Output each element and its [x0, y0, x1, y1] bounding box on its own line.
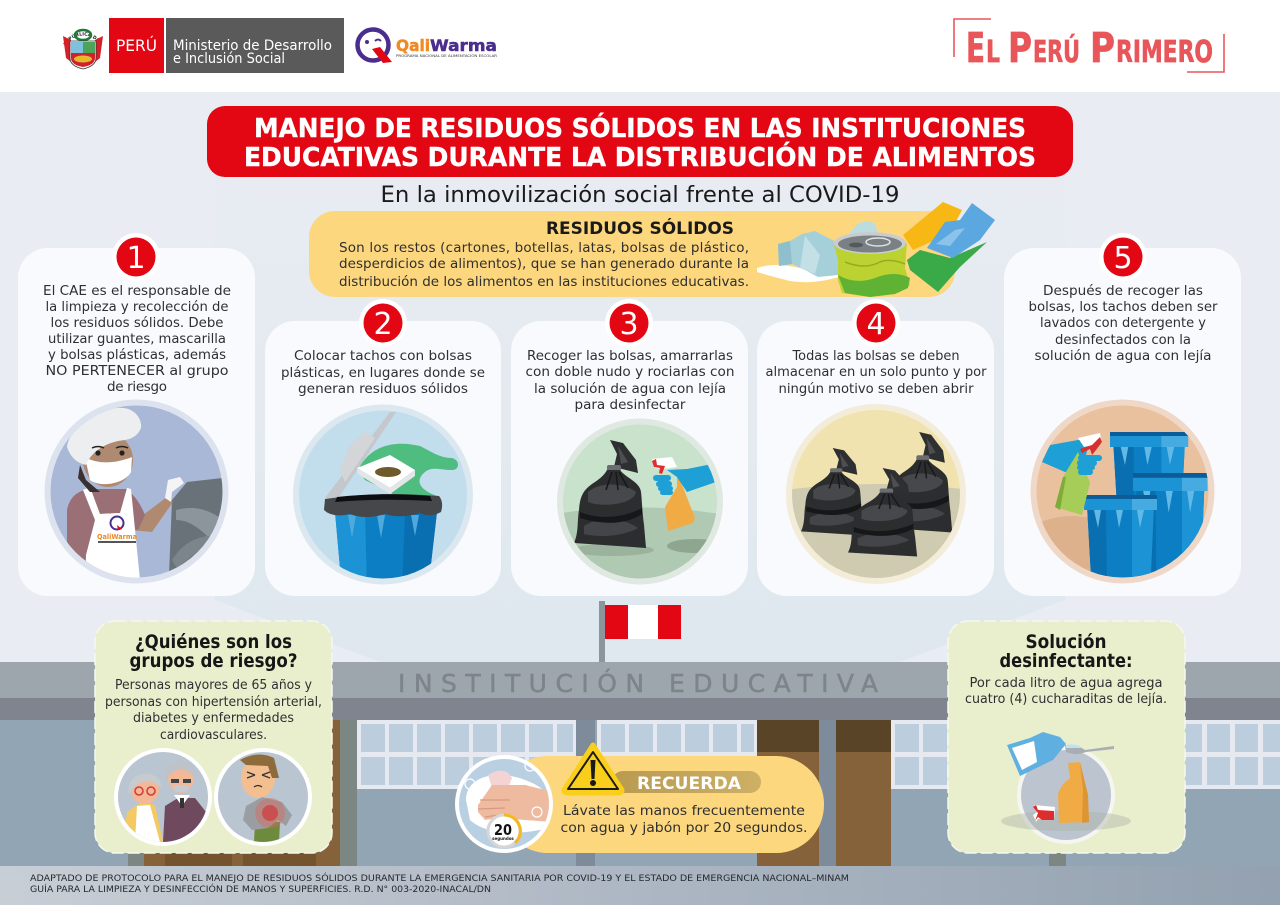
card 2 text: [281, 348, 485, 397]
card 1 text: de riesgo: [107, 379, 167, 395]
logo: Ministerio box: Ministerio de Desarrollo: [173, 38, 332, 54]
footer sources text: ADAPTADO DE PROTOCOLO PARA EL MANEJO DE RESIDUOS SÓLIDOS DURANTE LA EMERGENCIA SANITARIA POR COVID-19 Y EL ESTADO DE EMERGENCIA NACIONAL–MINAM: [30, 872, 849, 884]
title banner: EDUCATIVAS DURANTE LA DISTRIBUCIÓN DE ALIMENTOS: [244, 141, 1036, 173]
panel: residuos sólidos: [309, 202, 995, 297]
panel: recuerda: [455, 745, 824, 853]
icon: washing hands 20 seconds: 20: [494, 821, 512, 839]
logo: Qali Warma: Qali: [396, 36, 430, 55]
riesgo heading: grupos de riesgo?: [130, 650, 298, 672]
logo: El Perú Primero: [954, 19, 1224, 72]
card 4 text: [766, 348, 987, 397]
card 3: [511, 299, 748, 596]
card 2 text: plásticas, en lugares donde se: [281, 365, 485, 381]
header band: [0, 0, 1280, 92]
card 1 text: [43, 283, 231, 395]
card 2 text: generan residuos sólidos: [298, 381, 468, 397]
icon: warning sign: [564, 745, 622, 793]
card 3 text: con doble nudo y rociarlas con: [526, 364, 734, 380]
residuos text: [339, 240, 749, 290]
illustration: bin with tray: [293, 404, 473, 584]
residuos text: distribución de los alimentos en las instituciones educativas.: [339, 274, 749, 290]
logo: Ministerio box: [166, 18, 344, 73]
solución heading: desinfectante:: [1000, 650, 1132, 672]
residuos heading: RESIDUOS SÓLIDOS: [546, 217, 734, 239]
logo: El Perú Primero: E: [966, 24, 985, 72]
logo: El Perú Primero: RIMERO: [1116, 35, 1213, 70]
card 1 text: utilizar guantes, mascarilla: [48, 331, 226, 347]
card 5 text: solución de agua con lejía: [1034, 348, 1212, 364]
illustration: bleach and spray bottle: [1001, 732, 1131, 842]
building sign text: INSTITUCIÓN EDUCATIVA: [398, 668, 878, 698]
footer sources text: [30, 872, 849, 895]
riesgo text: cardiovasculares.: [160, 727, 267, 743]
illustration: worker with bag: QaliWarma: [97, 533, 137, 541]
number badge 2: 2: [373, 307, 393, 342]
solución heading: [1000, 631, 1132, 672]
recuerda text: Lávate las manos frecuentemente: [563, 803, 805, 819]
card 1 text: la limpieza y recolección de: [46, 299, 228, 315]
residuos text: Son los restos (cartones, botellas, latas, bolsas de plástico,: [339, 240, 749, 256]
card 4 text: almacenar en un solo punto y por: [766, 364, 987, 380]
card 1: [18, 233, 255, 596]
card 5 text: [1028, 283, 1218, 364]
logo: Qali Warma: [358, 30, 498, 63]
riesgo text: diabetes y enfermedades: [133, 710, 294, 726]
building: [0, 662, 1280, 866]
card 3 text: Recoger las bolsas, amarrarlas: [527, 348, 733, 364]
illustration: solid waste pile: [757, 202, 995, 297]
solución text: [965, 675, 1167, 707]
recuerda text: con agua y jabón por 20 segundos.: [560, 820, 808, 836]
number badge 3: 3: [619, 307, 639, 342]
riesgo text: Personas mayores de 65 años y: [115, 677, 312, 693]
logo: El Perú Primero: P: [1008, 24, 1032, 72]
logo: Qali Warma: Warma: [430, 36, 497, 55]
icon: washing hands 20 seconds: [455, 755, 555, 853]
number badge 1: [112, 233, 160, 281]
icon: man with heart pain: [214, 748, 312, 846]
card 3 text: para desinfectar: [574, 397, 686, 413]
logo: El Perú Primero: ERÚ: [1033, 33, 1080, 70]
riesgo heading: ¿Quiénes son los: [135, 631, 292, 653]
recuerda label: RECUERDA: [637, 774, 742, 794]
icon: coat of arms of Peru: [63, 28, 103, 70]
logo: PERÚ red box: [109, 18, 164, 73]
card 1 text: NO PERTENECER al grupo: [46, 363, 229, 379]
solución heading: Solución: [1026, 631, 1106, 653]
card 5 text: Después de recoger las: [1043, 283, 1203, 299]
solución text: Por cada litro de agua agrega: [970, 675, 1162, 691]
illustration: washed bins and spray: [1030, 400, 1220, 595]
number badge 4: 4: [866, 307, 886, 342]
logo: Qali Warma: PROGRAMA NACIONAL DE ALIMENTACIÓN ESCOLAR: [396, 53, 498, 58]
flag of Peru: [599, 601, 681, 662]
card 2: [265, 299, 501, 596]
card 3 text: la solución de agua con lejía: [534, 381, 726, 397]
card 4 text: ningún motivo se deben abrir: [778, 381, 974, 397]
title banner: [207, 106, 1073, 177]
residuos text: desperdicios de alimentos), que se han generado durante la: [339, 256, 749, 272]
card 1 text: los residuos sólidos. Debe: [50, 315, 224, 331]
recuerda label: [612, 771, 761, 794]
riesgo text: personas con hipertensión arterial,: [105, 694, 322, 710]
card 5 text: desinfectados con la: [1055, 332, 1191, 348]
riesgo heading: [130, 631, 298, 672]
logo: El Perú Primero: P: [1090, 24, 1115, 72]
card 1 text: El CAE es el responsable de: [43, 283, 231, 299]
number badge 3: [605, 299, 653, 347]
card 4: [757, 299, 994, 596]
card 1 text: y bolsas plásticas, además: [48, 347, 226, 363]
footer strip: [0, 866, 1280, 905]
card 3 text: [526, 348, 734, 413]
logo: Ministerio box: e Inclusión Social: [173, 51, 285, 67]
card 5 text: lavados con detergente y: [1040, 315, 1206, 331]
number badge 2: [359, 299, 407, 347]
logo: El Perú Primero: L: [986, 35, 1000, 70]
solución text: cuatro (4) cucharaditas de lejía.: [965, 691, 1167, 707]
number badge 1: 1: [126, 241, 146, 276]
subtitle: En la inmovilización social frente al COVID-19: [380, 182, 900, 208]
logo: PERÚ red box: PERÚ: [116, 36, 157, 55]
icon: elderly couple: [114, 748, 212, 846]
card 5 text: bolsas, los tachos deben ser: [1028, 299, 1218, 315]
number badge 5: [1099, 233, 1147, 281]
building windows: [357, 720, 1280, 789]
number badge 4: [852, 299, 900, 347]
title banner: MANEJO DE RESIDUOS SÓLIDOS EN LAS INSTITUCIONES: [254, 112, 1026, 144]
riesgo text: [105, 677, 322, 743]
recuerda text: [560, 803, 808, 836]
illustration: worker with bag: [40, 400, 230, 590]
card 5: [1004, 233, 1241, 596]
illustration: bag being sprayed: [555, 415, 725, 590]
card 2 text: Colocar tachos con bolsas: [294, 348, 472, 364]
panel: grupos de riesgo: [95, 621, 332, 853]
icon: washing hands 20 seconds: segundos: [492, 836, 514, 841]
card 4 text: Todas las bolsas se deben: [792, 348, 960, 364]
illustration: three black bags: [785, 400, 970, 590]
panel: solución desinfectante: [948, 621, 1185, 853]
footer sources text: GUÍA PARA LA LIMPIEZA Y DESINFECCIÓN DE MANOS Y SUPERFICIES. R.D. N° 003-2020-INACAL/DN: [30, 883, 491, 895]
number badge 5: 5: [1113, 241, 1133, 276]
